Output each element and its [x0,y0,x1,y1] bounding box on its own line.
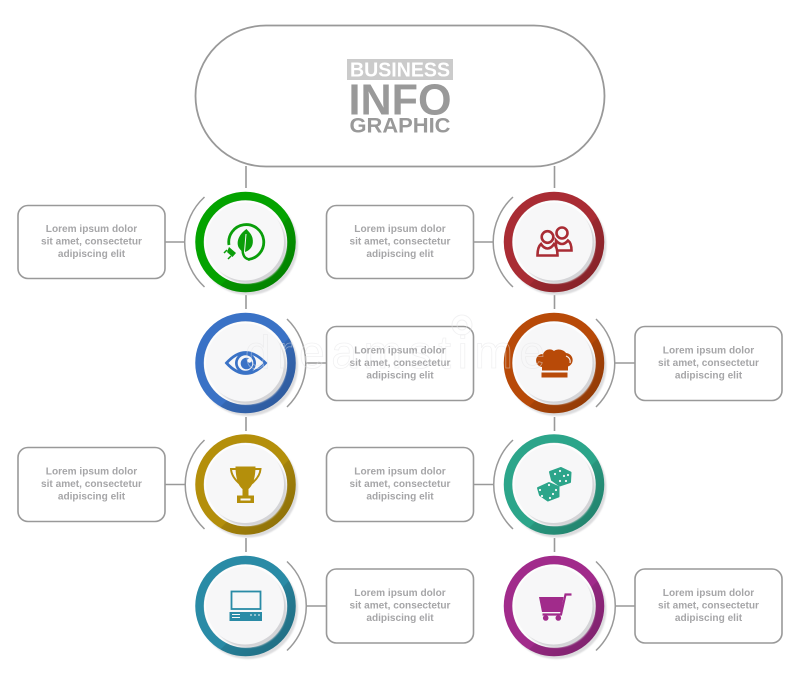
bracket 5 [474,197,513,287]
text box 2: adipiscing elit [366,370,434,382]
ring 7 [506,438,606,538]
ring 2 [198,316,298,416]
text box 1 [18,206,165,278]
title: GRAPHIC [350,114,450,138]
bracket 1 [165,197,204,287]
step 2: blue eye [198,316,474,416]
text box 4: adipiscing elit [366,613,434,624]
icon: leaf plug [224,225,264,260]
bracket 6 [596,319,635,407]
bracket 4 [287,562,326,650]
title: BUSINESS [350,60,450,82]
header panel [196,26,604,166]
text box 5: sit amet, consectetur [350,236,451,248]
watermark: dreamstime [245,326,545,378]
text box 8: sit amet, consectetur [658,600,759,612]
text box 3 [18,448,165,522]
icon: people [538,228,572,256]
bracket 8 [596,562,635,650]
text box 6: adipiscing elit [675,370,743,382]
text box 2 [326,326,474,400]
text box 1: sit amet, consectetur [41,236,142,248]
ring 6 [506,316,606,416]
title: INFO [348,76,452,124]
bracket 7 [474,440,513,529]
step 8: purple cart [506,559,782,659]
text box 1: Lorem ipsum dolor [46,224,137,235]
text box 8: adipiscing elit [675,613,743,624]
step 3: gold trophy [18,438,298,538]
text box 2: sit amet, consectetur [350,358,451,369]
text box 5 [326,206,474,278]
text box 7: adipiscing elit [366,492,434,502]
text box 7 [326,448,474,522]
text box 3: Lorem ipsum dolor [46,466,137,478]
icon: dice [538,468,570,500]
bracket 3 [165,440,204,529]
step 4: teal computer [198,559,474,659]
ring 8 [506,559,606,659]
text box 3: sit amet, consectetur [41,479,142,490]
text box 5: adipiscing elit [366,249,434,260]
text box 5: Lorem ipsum dolor [354,224,446,235]
icon: chef hat [536,349,573,378]
step 6: orange chef hat [506,316,782,416]
ring 5 [506,195,606,295]
icon: trophy [231,466,260,503]
icon: eye [226,352,266,374]
text box 8: Lorem ipsum dolor [663,588,754,599]
text box 7: Lorem ipsum dolor [354,466,446,478]
text box 4: Lorem ipsum dolor [354,588,446,599]
text box 1: adipiscing elit [58,249,126,260]
step 7: green dice [326,438,606,538]
text box 2: Lorem ipsum dolor [354,346,446,356]
text box 4: sit amet, consectetur [350,600,451,612]
vertical connectors [246,166,554,552]
text box 7: sit amet, consectetur [350,479,451,490]
text box 8 [635,569,782,643]
icon: cart [539,594,572,621]
ring 1 [198,195,298,295]
step 1: green leaf [18,195,298,295]
title [347,59,453,138]
step 5: red people [326,195,606,295]
text box 6: Lorem ipsum dolor [663,346,754,356]
text box 3: adipiscing elit [58,492,126,502]
text box 6: sit amet, consectetur [658,358,759,369]
ring 4 [198,559,298,659]
text box 6 [635,326,782,400]
bracket 2 [287,319,326,407]
text box 4 [326,569,474,643]
icon: computer [230,592,262,621]
ring 3 [198,438,298,538]
